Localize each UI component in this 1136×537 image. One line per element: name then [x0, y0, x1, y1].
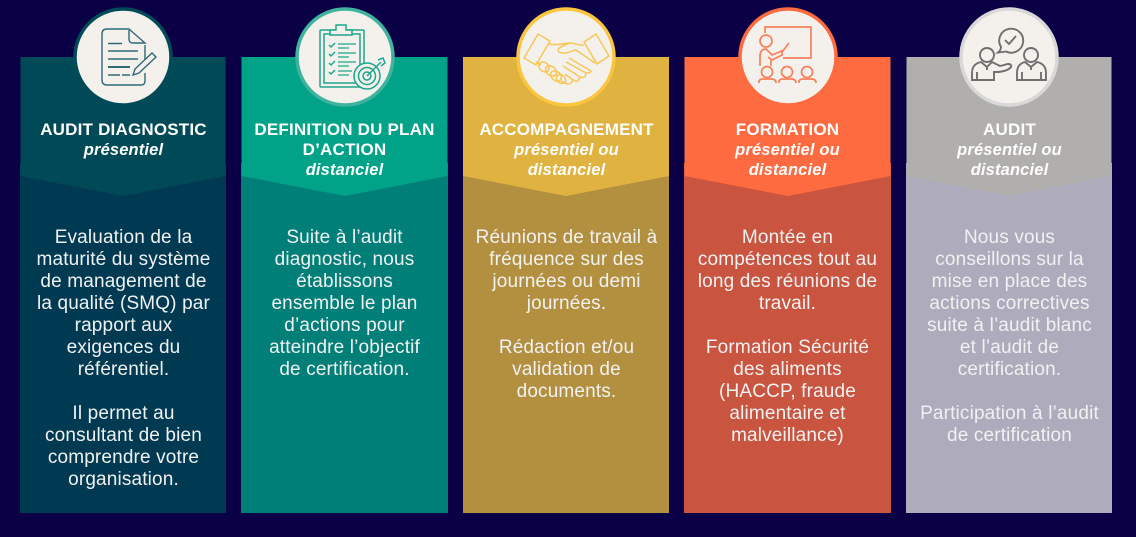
- heading: AUDIT: [983, 120, 1036, 139]
- panel: accompagnement: [463, 7, 669, 513]
- panel: audit: [906, 7, 1112, 513]
- text block: de certification: [947, 425, 1072, 446]
- text block: comprendre votre: [48, 447, 199, 468]
- heading: distanciel: [306, 161, 383, 179]
- text block: consultant de bien: [45, 425, 202, 446]
- text block: travail.: [759, 293, 816, 314]
- text block: [698, 227, 877, 446]
- text block: [269, 227, 420, 380]
- text block: actions correctives: [929, 293, 1090, 314]
- text block: la qualité (SMQ) par: [37, 293, 210, 314]
- text block: des aliments: [733, 359, 842, 380]
- icon: clipboard and target: [295, 7, 395, 107]
- text block: conseillons sur la: [935, 249, 1084, 270]
- text block: (HACCP, fraude: [719, 381, 856, 402]
- heading: présentiel ou: [514, 141, 619, 159]
- text block: et l’audit de: [960, 337, 1059, 358]
- text block: Suite à l’audit: [286, 227, 403, 248]
- text block: [476, 227, 658, 402]
- text block: Nous vous: [964, 227, 1055, 248]
- text block: journées ou demi: [492, 271, 641, 292]
- text block: Formation Sécurité: [706, 337, 869, 358]
- panel: formation: [684, 7, 891, 513]
- heading: [734, 120, 840, 179]
- text block: [920, 227, 1099, 446]
- heading: présentiel ou: [957, 141, 1062, 159]
- heading: distanciel: [749, 161, 826, 179]
- text block: certification.: [958, 359, 1061, 380]
- text block: journées.: [527, 293, 606, 314]
- text block: fréquence sur des: [489, 249, 644, 270]
- text block: d’actions pour: [284, 315, 405, 336]
- panel: audit diagnostic: [20, 7, 226, 513]
- heading: [40, 120, 207, 159]
- text block: établissons: [296, 271, 393, 292]
- text block: organisation.: [68, 469, 179, 490]
- text block: Réunions de travail à: [476, 227, 657, 248]
- text block: compétences tout au: [698, 249, 877, 270]
- text block: mise en place des: [932, 271, 1087, 292]
- text block: long des réunions de: [698, 271, 877, 292]
- text block: suite à l’audit blanc: [927, 315, 1092, 336]
- icon: document and pencil: [73, 7, 173, 104]
- icon: handshake: [516, 7, 616, 107]
- heading: [479, 120, 654, 179]
- icon: trainer at a board: [738, 7, 838, 104]
- heading: FORMATION: [736, 120, 839, 139]
- text block: diagnostic, nous: [275, 249, 414, 270]
- text block: validation de: [512, 359, 621, 380]
- heading: distanciel: [528, 161, 605, 179]
- text block: Rédaction et/ou: [499, 337, 634, 358]
- text block: atteindre l’objectif: [269, 337, 420, 358]
- heading: ACCOMPAGNEMENT: [479, 120, 654, 139]
- text block: documents.: [517, 381, 616, 402]
- heading: DEFINITION DU PLAN: [254, 120, 435, 139]
- text block: alimentaire et: [729, 403, 846, 424]
- text block: Evaluation de la: [55, 227, 192, 248]
- text block: Montée en: [742, 227, 833, 248]
- text block: exigences du: [67, 337, 180, 358]
- text block: malveillance): [731, 425, 844, 446]
- text block: de certification.: [279, 359, 410, 380]
- heading: présentiel ou: [735, 141, 840, 159]
- heading: D’ACTION: [303, 140, 386, 159]
- heading: AUDIT DIAGNOSTIC: [40, 120, 207, 139]
- text block: maturité du système: [37, 249, 210, 270]
- panel: definition du plan d'action: [241, 7, 448, 513]
- text block: de management de: [40, 271, 207, 292]
- text block: rapport aux: [75, 315, 172, 336]
- text block: référentiel.: [78, 359, 169, 380]
- text block: Il permet au: [72, 403, 175, 424]
- heading: [956, 120, 1062, 179]
- text block: Participation à l’audit: [920, 403, 1099, 424]
- heading: présentiel: [84, 141, 163, 159]
- heading: [254, 120, 435, 179]
- text block: ensemble le plan: [271, 293, 418, 314]
- icon: two people talking: [959, 7, 1059, 107]
- heading: distanciel: [971, 161, 1048, 179]
- text block: [37, 227, 210, 490]
